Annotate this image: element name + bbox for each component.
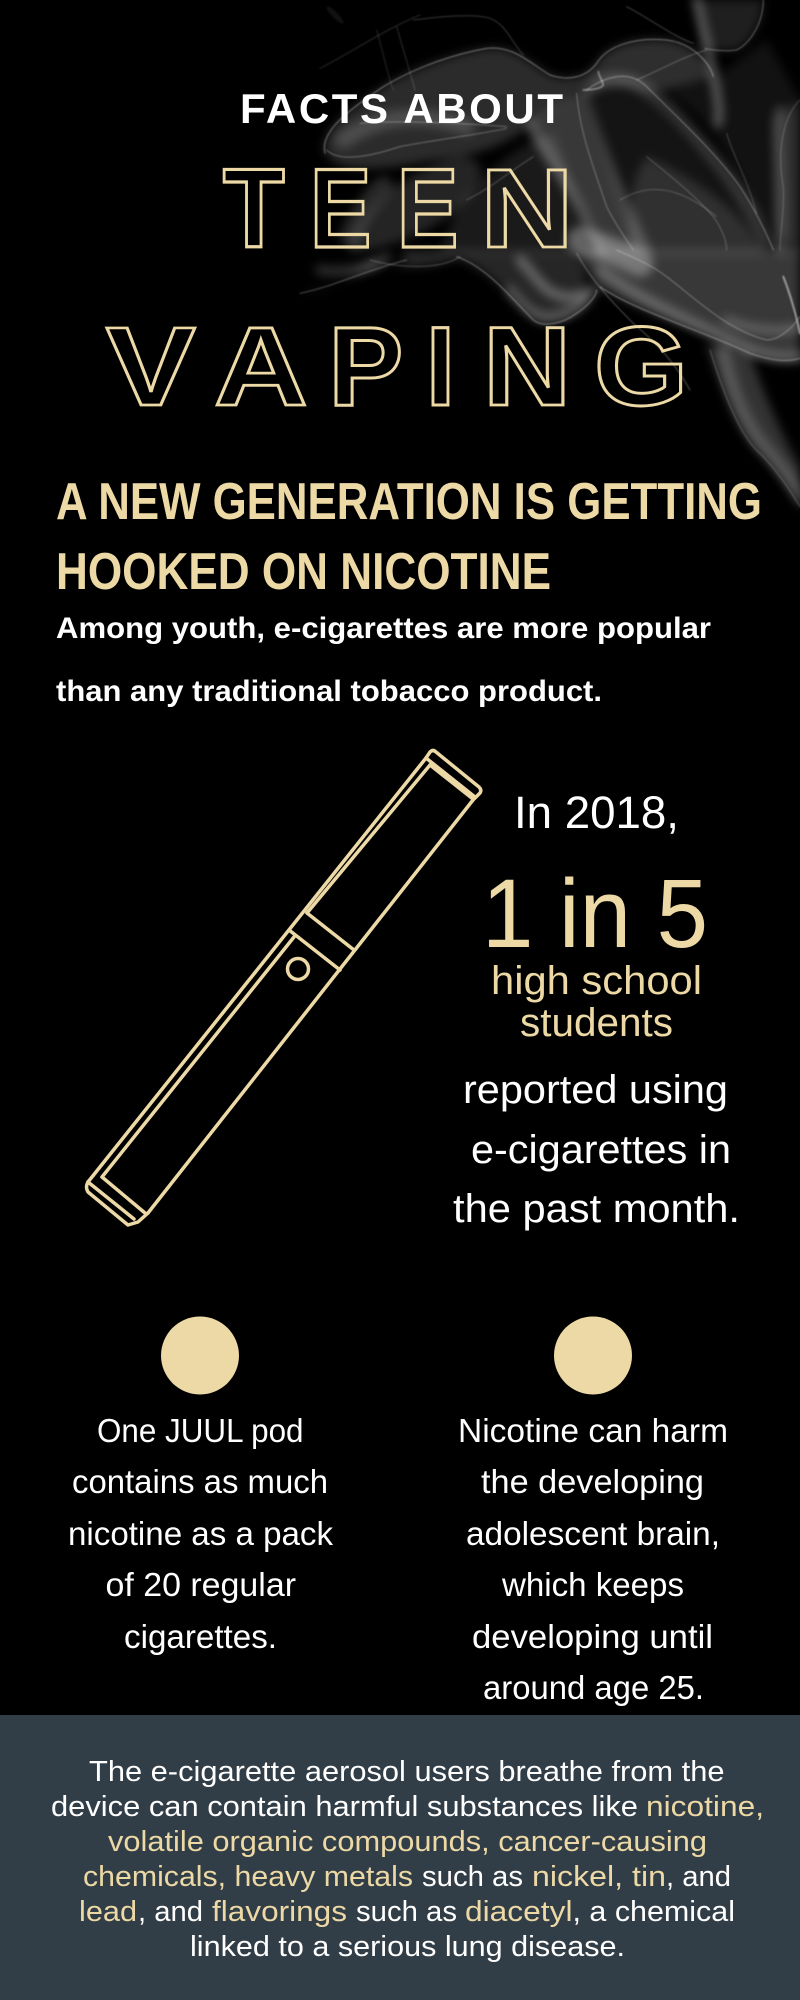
panel: aerosol substances: lead <box>79 1896 137 1928</box>
fact: adolescent brain: the developing <box>481 1463 704 1500</box>
panel: aerosol substances: nickel, tin <box>532 1861 666 1893</box>
fact: adolescent brain: around age 25. <box>483 1669 704 1706</box>
title: Vaping <box>106 303 688 429</box>
fact: adolescent brain: Nicotine can harm <box>458 1412 728 1449</box>
fact: JUUL pod: cigarettes. <box>124 1618 277 1655</box>
title: Vaping: I <box>426 304 455 429</box>
fact: JUUL pod <box>68 1412 333 1655</box>
fact: adolescent brain: developing until <box>472 1618 713 1655</box>
title: Vaping: N <box>483 304 571 429</box>
icon: bullet circle right <box>554 1316 632 1394</box>
panel: aerosol substances: nicotine, <box>646 1791 764 1823</box>
title: Teen: E <box>310 145 371 271</box>
stat: 1 in 5 high school students: In 2018, <box>514 787 679 838</box>
panel: aerosol substances: device can contain harmful substances like <box>51 1791 638 1823</box>
icon: bullet circle left <box>161 1316 239 1394</box>
intro text: Among youth, e-cigarettes are more popular <box>56 612 711 645</box>
panel: aerosol substances: chemicals, heavy metals <box>83 1861 413 1893</box>
panel: aerosol substances: , and <box>138 1896 203 1928</box>
title: Teen: N <box>480 145 574 271</box>
panel: aerosol substances: , and <box>666 1861 731 1893</box>
stat: 1 in 5 high school students: the past month. <box>453 1187 740 1231</box>
stat: 1 in 5 high school students: high school <box>491 959 702 1003</box>
title: Vaping: P <box>328 304 403 429</box>
title: Vaping: V <box>106 305 196 429</box>
title: Vaping: G <box>594 303 688 429</box>
title: Vaping: A <box>214 303 308 429</box>
panel: aerosol substances: linked to a serious lung disease. <box>190 1931 625 1963</box>
title: Teen <box>223 145 574 271</box>
fact: JUUL pod: One JUUL pod <box>97 1412 304 1449</box>
subheading: HOOKED ON NICOTINE <box>56 543 551 601</box>
panel: aerosol substances: The e-cigarette aerosol users breathe from the <box>89 1756 724 1788</box>
stat: 1 in 5 high school students: 1 in 5 <box>482 859 708 968</box>
stat: 1 in 5 high school students: students <box>520 1001 673 1045</box>
panel: aerosol substances <box>0 1715 800 2000</box>
fact: JUUL pod: contains as much <box>72 1463 328 1500</box>
fact: JUUL pod: of 20 regular <box>106 1566 296 1603</box>
icon: e-cigarette device <box>86 750 481 1225</box>
fact: adolescent brain: adolescent brain, <box>466 1515 720 1552</box>
heading: Facts About: FACTS ABOUT <box>240 85 563 132</box>
panel: aerosol substances: volatile organic compounds, cancer-causing <box>108 1826 707 1858</box>
stat: 1 in 5 high school students <box>453 787 740 1231</box>
title: Teen: E <box>397 145 458 271</box>
smoke background <box>300 0 800 507</box>
stat: 1 in 5 high school students: reported using <box>463 1068 728 1112</box>
intro text <box>56 612 711 708</box>
panel: aerosol substances: , a chemical <box>572 1896 735 1928</box>
fact: JUUL pod: nicotine as a pack <box>68 1515 333 1552</box>
fact: adolescent brain: which keeps <box>501 1566 684 1603</box>
intro text: than any traditional tobacco product. <box>56 675 602 708</box>
panel: aerosol substances: such as <box>356 1896 457 1928</box>
subheading <box>56 473 762 601</box>
panel: aerosol substances: such as <box>422 1861 523 1893</box>
stat: 1 in 5 high school students: e-cigarettes in <box>471 1128 731 1172</box>
fact: adolescent brain <box>458 1412 728 1706</box>
panel: aerosol substances: flavorings <box>212 1896 347 1928</box>
title: Teen: T <box>223 146 285 271</box>
panel: aerosol substances: diacetyl <box>465 1896 572 1928</box>
